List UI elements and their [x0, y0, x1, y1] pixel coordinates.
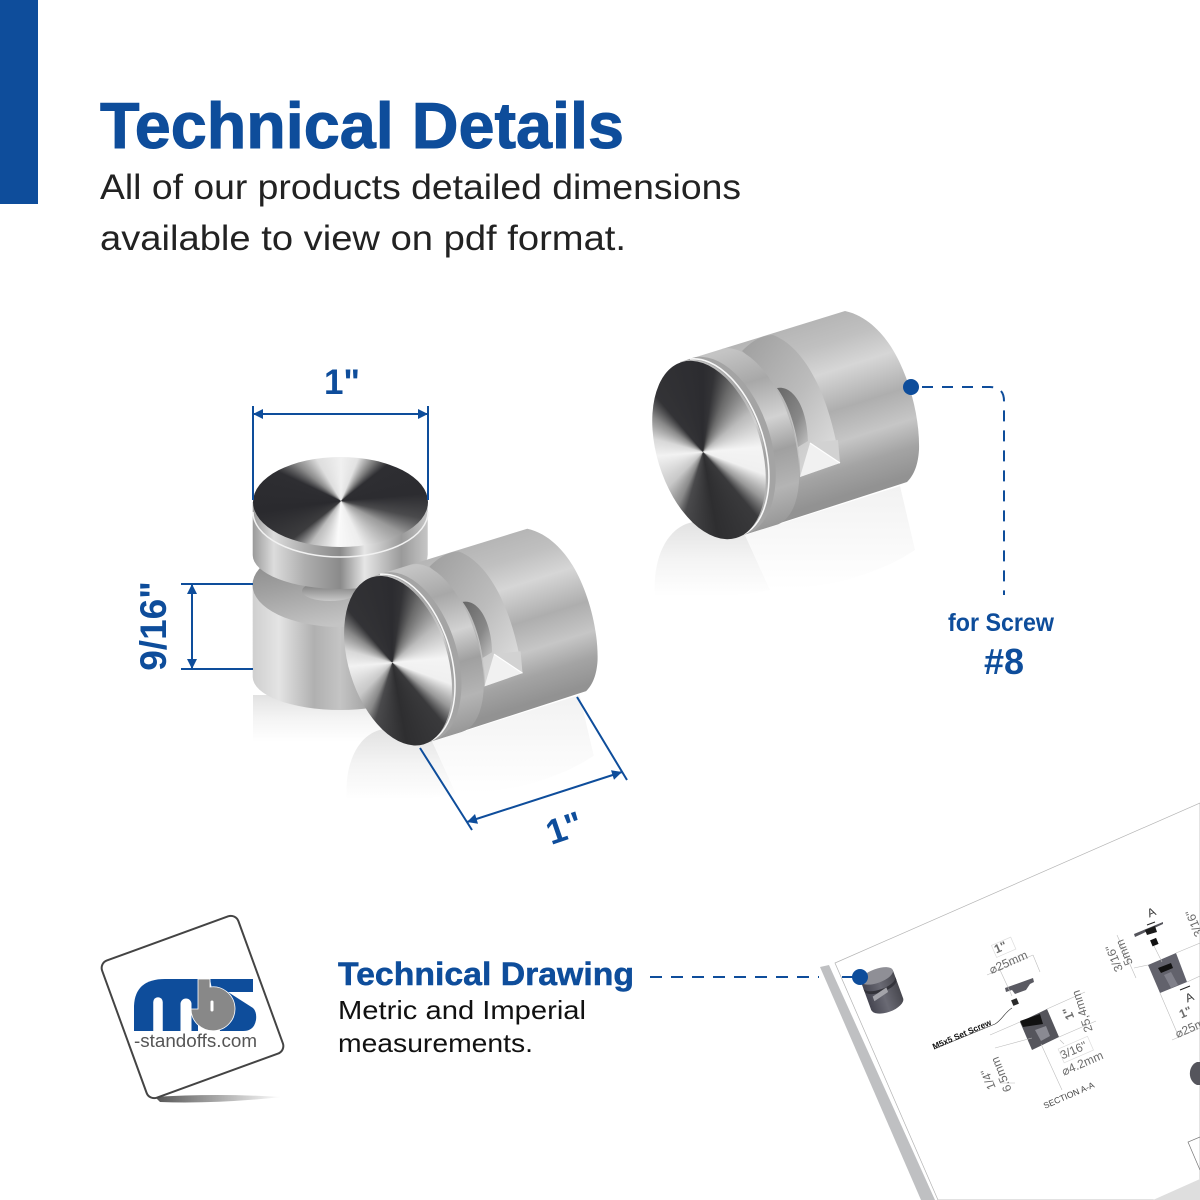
drawing: section labels: ⌀4.2mm [1059, 1048, 1105, 1079]
drawing: exploded view labels: 1" [1177, 1003, 1194, 1021]
collar [253, 502, 428, 589]
drawing: section view parts [934, 937, 1096, 1090]
logo card [99, 914, 286, 1102]
callout: for screw #8 [903, 379, 1055, 682]
text: measurements description: Metric and Imperial [338, 995, 586, 1025]
icon: small standoff [859, 964, 906, 1017]
drawing: exploded view [1117, 922, 1200, 1170]
dimension: depth 1 inch [420, 697, 627, 853]
drawing: section labels: 1" [1059, 1005, 1077, 1022]
logo text: -standoffs.com [134, 1030, 257, 1051]
collar ring line [253, 512, 428, 557]
dimension: depth 1 inch: 1" [541, 804, 588, 853]
brushed face [652, 360, 766, 540]
drawing: exploded view labels: 3/16" [1103, 943, 1126, 974]
drawing: section labels: 6.5mm [988, 1055, 1015, 1094]
heading: technical drawing: Technical Drawing [338, 956, 634, 992]
sheet background [835, 803, 1200, 1200]
text: measurements description: measurements. [338, 1028, 533, 1058]
dimension: height 9/16 inch [133, 581, 253, 671]
drawing: exploded view labels: 5mm [1113, 938, 1136, 967]
drawing: exploded view labels [1103, 904, 1200, 1041]
arrow: callout to drawing [650, 969, 868, 985]
brushed face [344, 576, 452, 746]
subtitle: available to view on pdf format. [100, 219, 626, 258]
title: Technical Details [100, 89, 624, 162]
subtitle: All of our products detailed dimensions [100, 168, 741, 207]
drawing: section labels: 1/4" [978, 1067, 999, 1092]
dimension: top width 1 inch [253, 363, 428, 500]
slot flat [252, 543, 428, 627]
reflection [253, 695, 400, 742]
drawing: exploded view labels: A [1145, 904, 1158, 920]
drawing: exploded view labels: A [1183, 989, 1196, 1005]
text: measurements description [338, 995, 586, 1058]
callout: for screw #8: #8 [984, 641, 1024, 682]
drawing: section labels [931, 938, 1105, 1111]
callout: for screw #8: for Screw [948, 609, 1055, 637]
product: tilted standoff, right [652, 311, 920, 570]
drawing: section labels: M5x5 Set Screw [931, 1017, 993, 1051]
drawing: section labels: 1" [992, 938, 1009, 956]
body [253, 585, 428, 710]
dimension: height 9/16 inch: 9/16" [133, 581, 174, 671]
card shadow [155, 1095, 282, 1102]
product: tilted standoff, front [344, 528, 598, 774]
drawing: section labels: 25,4mm [1069, 988, 1096, 1034]
drawing: section labels: ⌀25mm [987, 948, 1030, 977]
dimension: top width 1 inch: 1" [324, 363, 360, 402]
technical drawing sheet [820, 802, 1200, 1200]
product: upright standoff [252, 457, 428, 724]
drawing: section labels: 3/16" [1058, 1038, 1089, 1062]
logo mark [130, 979, 260, 1037]
sheet bottom edge [1153, 1179, 1200, 1200]
slot hole [302, 581, 358, 601]
sheet shadow edge [820, 965, 935, 1200]
drawing: section labels: SECTION A-A [1042, 1080, 1096, 1111]
brushed top face [253, 457, 428, 547]
blue corner bar [0, 0, 38, 204]
subtitle [100, 168, 741, 258]
